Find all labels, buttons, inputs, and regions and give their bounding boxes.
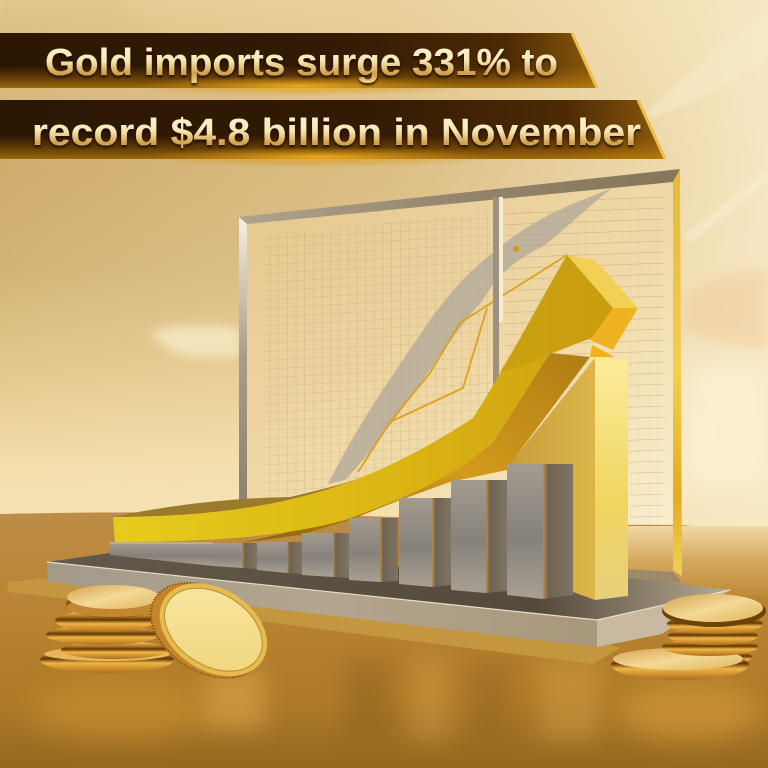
- bar 7: [451, 480, 507, 593]
- silver bars: [110, 464, 573, 599]
- title text line 2: record $4.8 billion in November: [32, 112, 641, 154]
- bar 6: [399, 498, 451, 587]
- column: [507, 358, 628, 600]
- left coin stack: [40, 585, 174, 673]
- arrow underside: [240, 353, 590, 543]
- arrow upper shade: [113, 478, 360, 517]
- platform top: [47, 553, 730, 620]
- bar 1: [110, 543, 213, 566]
- coin: [61, 641, 169, 659]
- top coin: [662, 594, 766, 627]
- flat coin: [611, 648, 749, 680]
- platform front: [47, 562, 597, 647]
- bar 5: [349, 518, 398, 582]
- arrow head top face: [567, 255, 638, 308]
- title banner line 1: [0, 33, 597, 96]
- frame: top bar: [239, 169, 680, 224]
- coin: [40, 647, 174, 673]
- coin: [46, 625, 158, 645]
- frame: centre post: [493, 197, 503, 387]
- bar 3: [257, 542, 302, 574]
- column side face: [507, 358, 595, 600]
- leaning coin: [134, 560, 284, 699]
- title text line 1: Gold imports surge 331% to: [45, 42, 558, 84]
- arrow front face: [113, 255, 613, 542]
- grid: left section: [263, 212, 491, 498]
- platform side: [597, 590, 730, 647]
- column front face: [595, 358, 628, 600]
- frame: right post: [673, 169, 682, 576]
- shadow band behind the chart line: [328, 188, 612, 484]
- arrow head end face: [590, 308, 638, 350]
- arrow head shaded face: [500, 255, 613, 372]
- title banner line 2: [0, 100, 665, 167]
- bar 4: [302, 533, 349, 578]
- under-plate: [7, 578, 620, 664]
- line chart in gold: [358, 255, 567, 472]
- glass chart panel: [239, 169, 682, 583]
- right coin stack: [611, 594, 766, 680]
- panel: glass pane: [247, 182, 673, 525]
- base platform: [7, 553, 730, 664]
- chart data point: [513, 246, 519, 252]
- bar 8: [507, 464, 573, 599]
- grid: right section: [505, 195, 664, 525]
- coin: [55, 610, 155, 632]
- coin: [664, 648, 752, 666]
- frame: left post: [239, 217, 247, 500]
- background wall: [0, 0, 768, 540]
- coin: [668, 627, 758, 645]
- coin: [662, 638, 758, 656]
- rising arrow: [113, 255, 638, 543]
- coin: [66, 585, 160, 618]
- frame: bottom foot: [628, 569, 682, 583]
- floor: [0, 512, 768, 768]
- coin: [667, 614, 763, 634]
- bar 2: [213, 543, 257, 569]
